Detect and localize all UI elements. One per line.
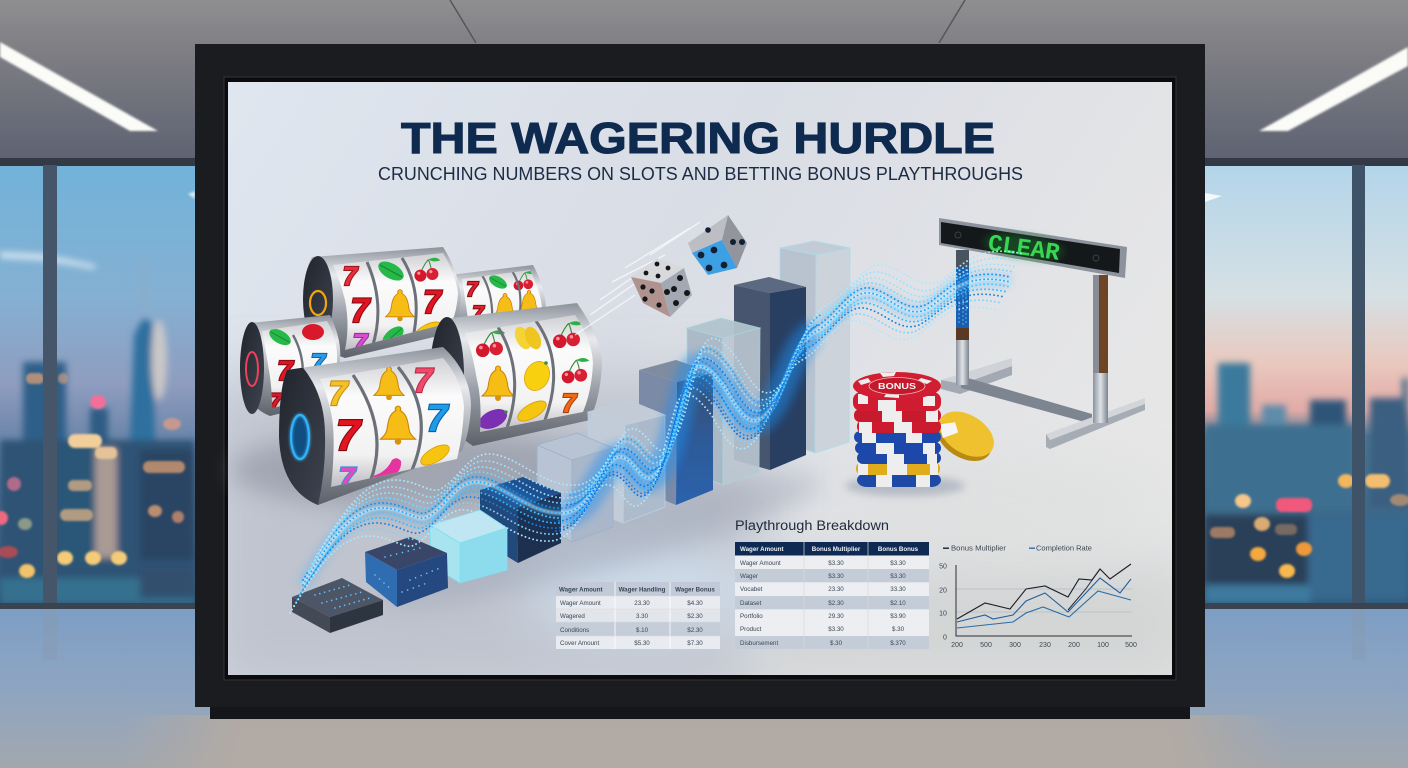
bar 2	[365, 537, 448, 607]
energy wave	[290, 251, 1023, 613]
slot reels group	[230, 247, 610, 510]
ceiling	[0, 0, 1408, 162]
small wager table: 3.30	[636, 613, 649, 620]
chart legend: Completion Rate	[1036, 544, 1092, 552]
small wager table: $5.30	[634, 640, 650, 647]
right post	[1093, 275, 1108, 423]
playthrough table: Dataset	[740, 600, 762, 607]
title: THE WAGERING HURDLE	[401, 114, 995, 163]
ceiling light left	[0, 42, 158, 131]
floor	[0, 609, 1408, 768]
bonus label: BONUS	[878, 382, 917, 391]
chart legend: Bonus Multiplier	[951, 544, 1007, 552]
playthrough table: 23.30	[828, 586, 844, 593]
right window skyline	[1205, 165, 1408, 603]
playthrough table: $2.30	[828, 600, 844, 607]
window frames	[0, 158, 1408, 166]
slot reel: front with blue ring: 7	[426, 398, 449, 440]
line chart: 20	[939, 588, 947, 594]
playthrough table: $2.10	[890, 600, 906, 607]
left window skyline	[0, 165, 195, 604]
chart legend	[943, 544, 1092, 552]
small wager table: Wager Handling	[619, 586, 666, 594]
playthrough table: $3.30	[828, 560, 844, 567]
playthrough breakdown heading: Playthrough Breakdown	[735, 518, 889, 533]
small wager table: Conditions	[560, 627, 589, 634]
line chart: 200	[951, 642, 963, 649]
line chart: 100	[1097, 642, 1109, 649]
playthrough table	[735, 542, 929, 649]
small wager table: Wager Bonus	[675, 586, 715, 594]
line chart: 50	[939, 564, 947, 570]
bar 4	[480, 477, 561, 563]
hurdle	[939, 218, 1145, 449]
playthrough table: Bonus Multiplier	[812, 546, 861, 553]
chip stack	[853, 392, 941, 487]
playthrough table: $3.30	[828, 573, 844, 580]
playthrough table: $.30	[830, 640, 843, 647]
slot reel: right with cherries	[430, 303, 602, 446]
slot reel: back middle with amber ring: 7	[351, 292, 372, 330]
playthrough table: Product	[740, 626, 762, 633]
slot reel: back right: 7	[472, 303, 484, 325]
line chart: 200	[1068, 642, 1080, 649]
slot reel: front with blue ring	[279, 347, 471, 505]
rising glass bars	[292, 241, 850, 633]
slot reel: left with red ring: 7	[311, 348, 327, 378]
subtitle: CRUNCHING NUMBERS ON SLOTS AND BETTING BONUS PLAYTHROUGHS	[378, 164, 1023, 184]
line chart: 300	[1009, 642, 1021, 649]
playthrough table: 29.30	[828, 613, 844, 620]
slot reel: right with cherries: 7	[562, 388, 578, 418]
playthrough table: Wager	[740, 573, 758, 580]
screen panel	[200, 82, 1200, 700]
playthrough table: $3.30	[828, 626, 844, 633]
playthrough table: Bonus Bonus	[878, 546, 919, 553]
playthrough table: $3.30	[890, 573, 906, 580]
die: five face	[631, 258, 692, 317]
slot reel: left with red ring: 7	[277, 355, 294, 386]
small wager table: Wager Amount	[559, 586, 603, 594]
small wager table: Cover Amount	[560, 640, 599, 647]
bar 6	[588, 400, 665, 523]
slot reel: back right	[456, 265, 546, 318]
playthrough table: Disbursement	[740, 640, 778, 647]
playthrough table: 33.30	[890, 586, 906, 593]
ceiling light right	[1259, 47, 1408, 131]
bar 5	[537, 433, 613, 542]
left post	[956, 250, 969, 385]
small wager table: Wagered	[560, 613, 585, 620]
motion lines	[575, 222, 700, 335]
small wager table: $7.30	[687, 640, 703, 647]
playthrough table: $.370	[890, 640, 906, 647]
casino chips	[845, 372, 1002, 496]
line chart: 10	[939, 610, 947, 618]
playthrough table: Wager Amount	[740, 560, 781, 567]
clear label: CLEAR	[986, 231, 1062, 268]
line chart: 500	[980, 642, 992, 649]
gold chip	[928, 402, 1002, 470]
bar 7	[639, 360, 713, 505]
playthrough table: Wager Amount	[740, 546, 784, 553]
small wager table: 23.30	[634, 600, 650, 607]
line chart: 0	[943, 634, 947, 642]
small wager table: $4.30	[687, 600, 703, 607]
hurdle base	[941, 358, 1145, 449]
slot reel: left with red ring	[240, 315, 342, 416]
bar 8	[687, 318, 760, 485]
small wager table	[556, 582, 720, 649]
playthrough table: $3.90	[890, 613, 906, 620]
bar 10	[780, 241, 850, 453]
slot reel: front with blue ring: 7	[339, 462, 357, 495]
small wager table: $.10	[636, 627, 649, 634]
sign board	[939, 218, 1127, 278]
slot reel: back middle with amber ring	[303, 247, 461, 358]
top chip face	[853, 372, 941, 400]
bar 1	[292, 578, 383, 633]
playthrough table: Vocabet	[740, 586, 763, 593]
slot reel: back middle with amber ring: 7	[353, 328, 369, 358]
slot reel: back middle with amber ring: 7	[343, 261, 359, 291]
playthrough table: $3.30	[890, 560, 906, 567]
bar 9	[734, 277, 806, 470]
die: blue face	[688, 215, 747, 275]
slot reel: front with blue ring: 7	[329, 375, 350, 413]
line chart	[939, 544, 1137, 649]
slot reel: back middle with amber ring: 7	[423, 284, 443, 320]
display frame	[195, 44, 1205, 719]
small wager table: Wager Amount	[560, 600, 601, 607]
dice with motion lines	[575, 215, 747, 335]
small wager table: $2.30	[687, 627, 703, 634]
playthrough table: Portfolio	[740, 613, 763, 620]
small wager table: $2.30	[687, 613, 703, 620]
slot reel: front with blue ring: 7	[414, 362, 435, 400]
slot reel: back right: 7	[466, 279, 478, 301]
line chart: 230	[1039, 642, 1051, 649]
slot reel: front with blue ring: 7	[336, 411, 363, 460]
line chart: 500	[1125, 642, 1137, 649]
bar 3	[430, 510, 507, 583]
playthrough table: $.30	[892, 626, 905, 633]
slot reel: left with red ring: 7	[268, 389, 283, 416]
